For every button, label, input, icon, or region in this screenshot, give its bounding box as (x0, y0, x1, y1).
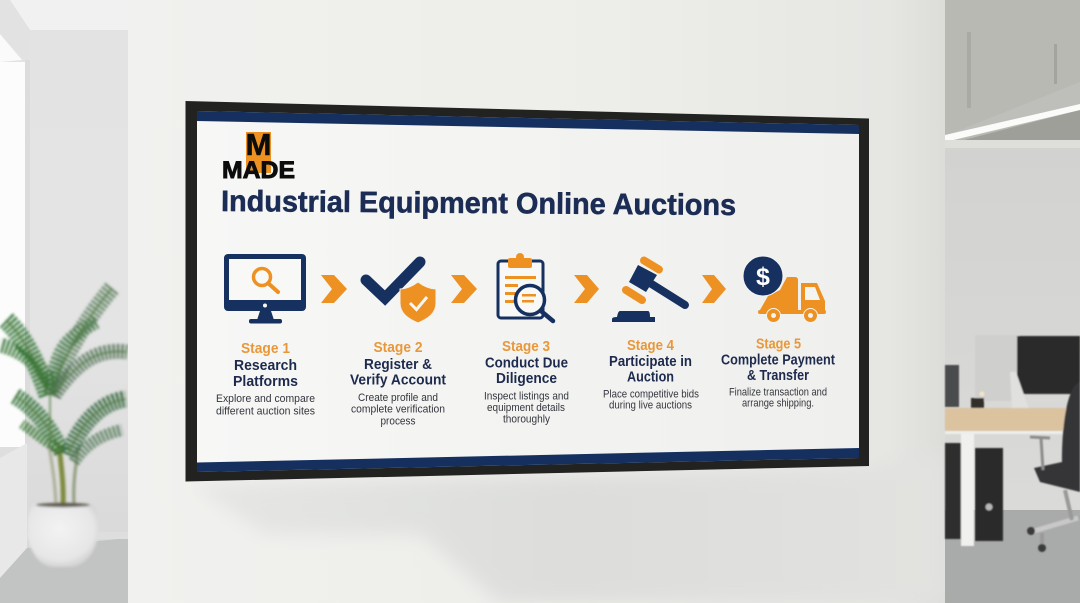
navy bottom band (197, 448, 859, 472)
stage 4 text: Participate in (609, 354, 692, 370)
stage 4 text: Stage 4 (627, 338, 674, 354)
stage 2 text: Verify Account (350, 372, 446, 388)
logo: MADE (222, 127, 295, 184)
stage 3 text: equipment details (487, 402, 565, 414)
stage 1 text: Platforms (233, 374, 298, 390)
stage 4 text: Auction (627, 370, 674, 386)
navy top band (197, 111, 859, 134)
left room background (0, 0, 128, 603)
stage 2 text (350, 340, 446, 428)
frame shadow on wall (190, 452, 945, 603)
stage 1 text: Research (234, 358, 297, 374)
poster panel (197, 111, 859, 472)
icon: check mark with shield (366, 262, 436, 323)
icon: clipboard with magnifier (498, 253, 553, 321)
arrow 3 (574, 275, 599, 303)
stage 3 text (484, 339, 569, 426)
stage 2 text: Create profile and (358, 392, 438, 404)
poster frame (186, 101, 869, 482)
stage 5 text: & Transfer (747, 368, 809, 384)
stage 3 text: Conduct Due (485, 356, 568, 372)
plant pot (28, 504, 98, 567)
stage 3 text: thoroughly (503, 414, 550, 426)
stage 1 text: different auction sites (216, 406, 315, 418)
stage 5 text: Stage 5 (756, 336, 801, 352)
stage 5 text (721, 336, 835, 410)
stage 3 text: Inspect listings and (484, 390, 569, 402)
stage 3 text: Diligence (496, 371, 557, 387)
logo: MADE: M (246, 127, 272, 162)
stage 3 text: Stage 3 (502, 339, 550, 355)
arrow 4 (702, 275, 726, 303)
right office background (945, 0, 1080, 603)
central wall (128, 0, 945, 603)
stage 4 text (603, 338, 699, 412)
icon: gavel (612, 260, 685, 322)
stage 2 text: complete verification (351, 404, 445, 416)
stage 1 text (216, 341, 315, 418)
logo: MADE: MADE (222, 157, 295, 184)
stage 5 text: Complete Payment (721, 352, 835, 368)
stage 1 text: Explore and compare (216, 393, 315, 405)
stage 5 text: arrange shipping. (742, 398, 814, 410)
stage 1 text: Stage 1 (241, 341, 290, 357)
stage 5 text: Finalize transaction and (729, 386, 827, 398)
potted palm plant (0, 288, 127, 567)
stage 4 text: during live auctions (609, 400, 692, 412)
stage 4 text: Place competitive bids (603, 388, 699, 400)
stage 2 text: Stage 2 (374, 340, 422, 356)
stage 2 text: Register & (364, 357, 432, 373)
icon: dollar coin and delivery truck: $ (756, 263, 770, 291)
title: Industrial Equipment Online Auctions (221, 185, 736, 222)
arrow 1 (321, 275, 347, 303)
arrow 2 (451, 275, 477, 303)
icon: monitor with magnifier (224, 254, 306, 324)
icon: dollar coin and delivery truck (743, 256, 826, 322)
office desk with monitors and chair (945, 335, 1080, 552)
stage 2 text: process (380, 416, 416, 428)
